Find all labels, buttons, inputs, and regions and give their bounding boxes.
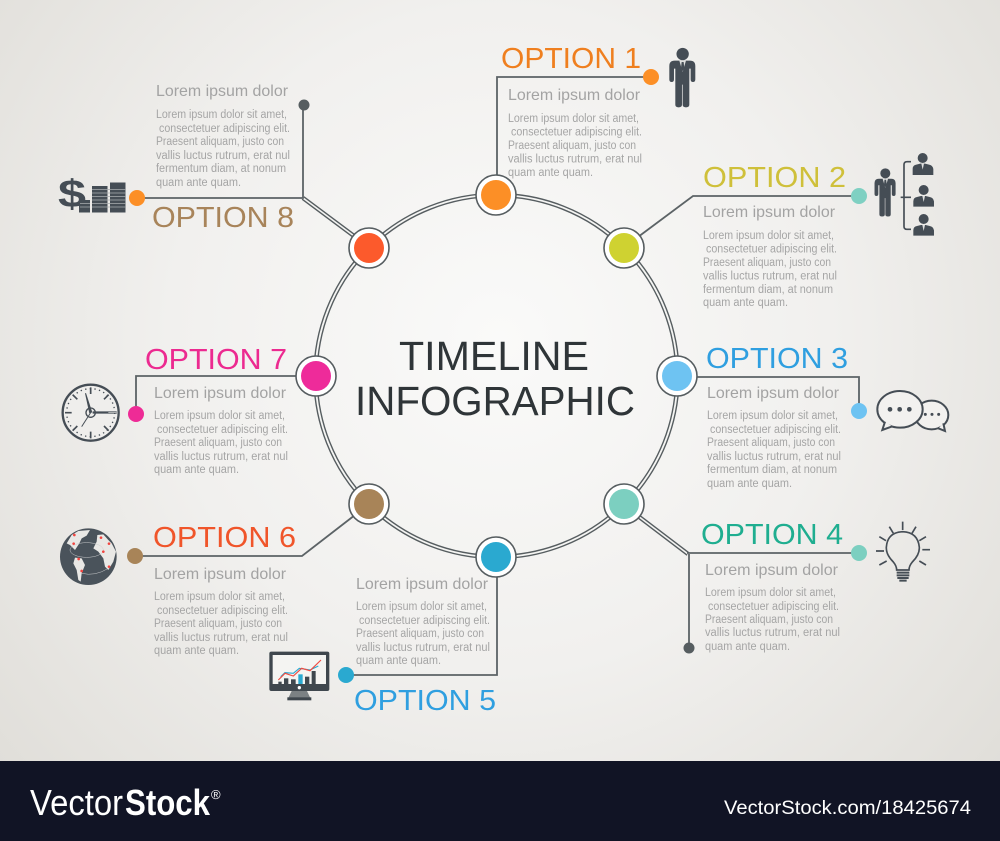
text block 8 bbox=[156, 83, 290, 189]
heading 5: OPTION 5 bbox=[354, 685, 496, 717]
heading 1: OPTION 1 bbox=[501, 43, 641, 75]
panel: option 6 bbox=[60, 484, 389, 657]
text block 8: consectetuer adipiscing elit. bbox=[159, 123, 290, 135]
text block 3 bbox=[707, 385, 841, 490]
text block 7: quam ante quam. bbox=[154, 464, 239, 476]
text block 1: Lorem ipsum dolor sit amet, bbox=[508, 113, 639, 125]
end dot 8 bbox=[129, 190, 145, 206]
footer bar bbox=[0, 761, 1000, 841]
text block 2: Lorem ipsum dolor bbox=[703, 204, 836, 221]
text block 5: quam ante quam. bbox=[356, 655, 441, 667]
node 6 bbox=[349, 484, 389, 524]
text block 2: fermentum diam, at nonum bbox=[703, 284, 833, 296]
panel: option 1 bbox=[476, 43, 695, 215]
heading 7: OPTION 7 bbox=[145, 344, 287, 376]
text block 6: Lorem ipsum dolor bbox=[154, 566, 287, 583]
title: INFOGRAPHIC bbox=[355, 378, 635, 424]
node 4 bbox=[604, 484, 644, 524]
text block 5 bbox=[356, 576, 490, 667]
text block 6: Lorem ipsum dolor sit amet, bbox=[154, 591, 285, 603]
icon: clock bbox=[63, 385, 119, 441]
title bbox=[355, 333, 635, 424]
text block 7: Lorem ipsum dolor sit amet, bbox=[154, 410, 285, 422]
text block 4: quam ante quam. bbox=[705, 641, 790, 653]
text block 3: fermentum diam, at nonum bbox=[707, 464, 837, 476]
text block 1: consectetuer adipiscing elit. bbox=[511, 126, 642, 138]
text block 5: Praesent aliquam, justo con bbox=[356, 628, 484, 640]
text block 4: Praesent aliquam, justo con bbox=[705, 614, 833, 626]
text block 7: consectetuer adipiscing elit. bbox=[157, 424, 288, 436]
icon: dollar and coin stacks: $ bbox=[58, 173, 86, 216]
text block 4: vallis luctus rutrum, erat nul bbox=[705, 627, 840, 639]
end dot 7 bbox=[128, 406, 144, 422]
panel: option 5 bbox=[269, 537, 516, 717]
text block 8: Lorem ipsum dolor sit amet, bbox=[156, 109, 287, 121]
end dot 6 bbox=[127, 548, 143, 564]
connector 3 bbox=[695, 377, 859, 411]
secondary dot 4 bbox=[684, 642, 694, 654]
icon: light bulb bbox=[876, 522, 930, 581]
end dot 2 bbox=[851, 188, 867, 204]
text block 2: Praesent aliquam, justo con bbox=[703, 257, 831, 269]
heading 6: OPTION 6 bbox=[153, 522, 296, 554]
text block 3: Praesent aliquam, justo con bbox=[707, 437, 835, 449]
icon: speech bubbles bbox=[877, 391, 948, 431]
panel: option 8 bbox=[58, 83, 389, 268]
text block 6 bbox=[154, 566, 288, 657]
heading 3: OPTION 3 bbox=[706, 343, 848, 375]
node 8 bbox=[349, 228, 389, 268]
node 3 bbox=[657, 356, 697, 396]
text block 3: consectetuer adipiscing elit. bbox=[710, 424, 841, 436]
footer logo bbox=[30, 782, 221, 823]
heading 2: OPTION 2 bbox=[703, 162, 846, 194]
text block 6: quam ante quam. bbox=[154, 645, 239, 657]
text block 1: vallis luctus rutrum, erat nul bbox=[508, 154, 642, 166]
text block 8: vallis luctus rutrum, erat nul bbox=[156, 150, 290, 162]
text block 6: consectetuer adipiscing elit. bbox=[157, 605, 288, 617]
node 2 bbox=[604, 228, 644, 268]
connector 4 bbox=[638, 516, 859, 648]
icon: monitor chart bbox=[269, 652, 329, 700]
text block 1: quam ante quam. bbox=[508, 167, 593, 179]
icon: dollar and coin stacks bbox=[58, 173, 126, 216]
connector 7 bbox=[136, 376, 298, 414]
text block 8: Lorem ipsum dolor bbox=[156, 83, 289, 100]
text block 1: Praesent aliquam, justo con bbox=[508, 140, 636, 152]
text block 6: Praesent aliquam, justo con bbox=[154, 618, 282, 630]
panel: option 7 bbox=[63, 344, 336, 476]
text block 4: Lorem ipsum dolor sit amet, bbox=[705, 587, 836, 599]
footer logo: Vector bbox=[30, 782, 123, 823]
footer url: VectorStock.com/18425674 bbox=[724, 798, 971, 819]
text block 8: quam ante quam. bbox=[156, 177, 241, 189]
text block 8: Praesent aliquam, justo con bbox=[156, 136, 284, 148]
icon: organisation bbox=[875, 153, 934, 236]
text block 5: consectetuer adipiscing elit. bbox=[359, 615, 490, 627]
end dot 5 bbox=[338, 667, 354, 683]
text block 1 bbox=[508, 87, 642, 179]
text block 2: quam ante quam. bbox=[703, 297, 788, 309]
connector 8 bbox=[137, 105, 354, 236]
connector 6 bbox=[135, 515, 355, 556]
footer logo: Stock bbox=[125, 782, 211, 823]
heading 8: OPTION 8 bbox=[152, 202, 294, 234]
end dot 3 bbox=[851, 403, 867, 419]
text block 2: vallis luctus rutrum, erat nul bbox=[703, 270, 837, 282]
icon: person bbox=[669, 48, 695, 107]
text block 2: consectetuer adipiscing elit. bbox=[706, 244, 837, 256]
node 1 bbox=[476, 175, 516, 215]
text block 8: fermentum diam, at nonum bbox=[156, 163, 286, 175]
title: TIMELINE bbox=[399, 333, 589, 379]
heading 4: OPTION 4 bbox=[701, 519, 843, 551]
secondary dot 8 bbox=[298, 100, 310, 110]
text block 5: Lorem ipsum dolor sit amet, bbox=[356, 601, 487, 613]
text block 7: Lorem ipsum dolor bbox=[154, 385, 287, 402]
text block 5: Lorem ipsum dolor bbox=[356, 576, 489, 593]
connector 5 bbox=[346, 575, 497, 675]
text block 5: vallis luctus rutrum, erat nul bbox=[356, 642, 490, 654]
connector 2 bbox=[638, 196, 859, 237]
text block 6: vallis luctus rutrum, erat nul bbox=[154, 632, 288, 644]
text block 4: consectetuer adipiscing elit. bbox=[708, 601, 839, 613]
panel: option 2 bbox=[604, 153, 934, 309]
text block 4 bbox=[705, 562, 840, 653]
connector 1 bbox=[497, 77, 651, 178]
icon: globe bbox=[60, 528, 117, 585]
text block 2 bbox=[703, 204, 837, 309]
text block 7: vallis luctus rutrum, erat nul bbox=[154, 451, 288, 463]
text block 3: Lorem ipsum dolor bbox=[707, 385, 840, 402]
text block 7 bbox=[154, 385, 288, 476]
footer logo: ® bbox=[211, 787, 221, 802]
text block 7: Praesent aliquam, justo con bbox=[154, 437, 282, 449]
end dot 4 bbox=[851, 545, 867, 561]
node 7 bbox=[296, 356, 336, 396]
end dot 1 bbox=[643, 69, 659, 85]
text block 1: Lorem ipsum dolor bbox=[508, 87, 641, 104]
text block 4: Lorem ipsum dolor bbox=[705, 562, 839, 579]
panel: option 3 bbox=[657, 343, 948, 490]
text block 3: quam ante quam. bbox=[707, 478, 792, 490]
text block 3: Lorem ipsum dolor sit amet, bbox=[707, 410, 838, 422]
text block 3: vallis luctus rutrum, erat nul bbox=[707, 451, 841, 463]
node 5 bbox=[476, 537, 516, 577]
central ring bbox=[316, 195, 678, 557]
panel: option 4 bbox=[604, 484, 930, 654]
text block 2: Lorem ipsum dolor sit amet, bbox=[703, 230, 834, 242]
